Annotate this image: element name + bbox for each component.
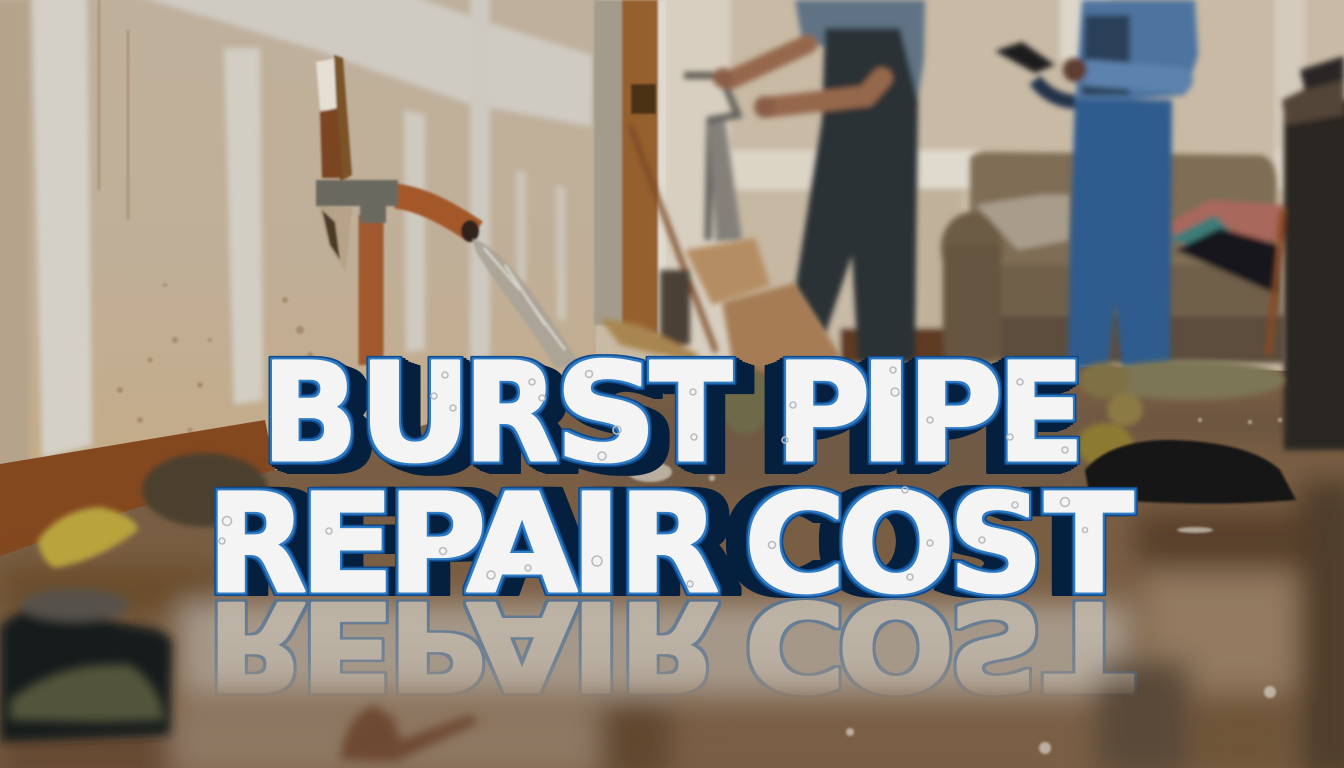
title line 2 left: repair: P [388,464,486,623]
title reflection: E [300,574,394,716]
title line 1 right: pipe: P [908,335,1002,493]
title: burst pipe repair cost [207,334,1134,624]
title reflection: R [207,574,307,717]
title reflection: C [744,574,846,716]
title line 2 right: cost: O [837,465,955,624]
title reflection: T [1044,574,1134,716]
floor tones and reflections [0,400,1344,768]
worker with tablet [995,0,1198,368]
title reflection: A [467,574,577,715]
worker with tool [684,0,925,360]
title line 1 right: pipe: E [997,334,1085,493]
baseboard [0,420,275,556]
water stream [472,238,582,368]
sofa [941,152,1285,365]
reddish arm reflection [340,705,480,762]
title line 1 left: burst: R [464,334,558,493]
title reflection [214,598,1138,695]
dark box foreground [0,589,172,742]
title line 1 left: burst [262,334,732,493]
title line 1 left: burst: U [359,334,471,493]
title line 2 left: repair: E [300,465,394,624]
left drywall [0,0,596,470]
title reflection: P [388,574,486,715]
title line 1 right: pipe: I [859,334,913,492]
wall stains [98,0,333,432]
wall joints [0,0,592,470]
title line 2 left: repair: I [571,466,621,624]
title reflection: R [619,574,719,716]
door frame [594,0,666,350]
insulation debris right [720,360,1285,467]
yellow insulation [38,507,138,568]
title line 1 left: burst: T [650,335,732,493]
dark dresser [1268,56,1344,450]
title line 1 right: pipe: P [776,335,870,493]
title line 1 right: pipe [776,334,1085,493]
back room wall [590,0,1344,380]
title line 1 left: burst: B [262,334,358,492]
water splash [628,418,1282,754]
wall hole [316,55,352,272]
title line 2 left: repair [207,464,719,624]
title line 2 right: cost [744,465,1134,624]
title reflection: O [837,574,955,716]
title line 2 right: cost: C [744,465,846,624]
title line 2 right: cost: S [948,465,1044,623]
pipe assembly [316,193,479,365]
water droplets on letters [219,367,1088,587]
insulation lump left [142,453,268,527]
insulation foreground [10,664,165,722]
cardboard boxes [600,125,840,372]
floor water [0,362,1344,768]
title reflection: I [571,574,621,717]
title line 2 left: repair: R [619,466,719,624]
title line 1 left: burst: S [555,334,657,492]
title line 2 left: repair: R [207,466,307,624]
title line 2 left: repair: A [467,465,577,623]
black trash bag [1085,440,1296,504]
title reflection: S [948,573,1044,716]
title line 2 right: cost: T [1044,466,1134,624]
